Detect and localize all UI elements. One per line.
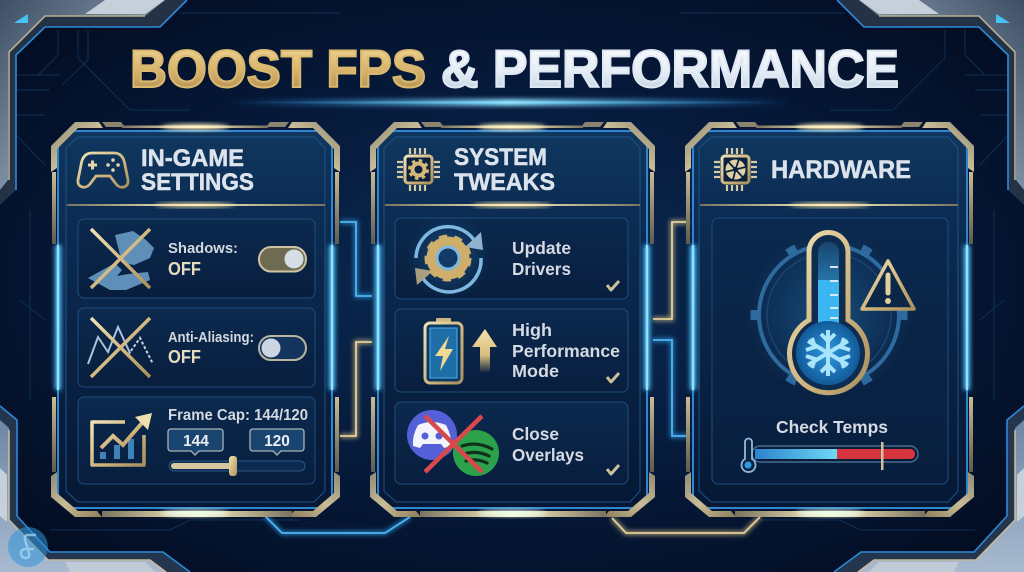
value box: 144 — [168, 429, 223, 455]
row: frame cap — [78, 397, 315, 484]
label: anti-aliasing off: OFF — [168, 347, 201, 367]
title: BOOST FPS — [130, 40, 426, 99]
check mark — [607, 281, 619, 290]
label: close overlays: Close — [512, 424, 559, 444]
label: high performance mode: Mode — [512, 361, 559, 381]
value box: 120 — [250, 429, 304, 455]
heading: in-game settings: SETTINGS — [141, 169, 254, 196]
panel 1 frame — [51, 122, 340, 517]
heading: hardware: HARDWARE — [771, 156, 911, 184]
label: shadows off: Shadows: — [168, 240, 238, 257]
panel 2 frame — [370, 122, 655, 517]
icon: warning triangle — [862, 261, 914, 309]
heading: system tweaks: SYSTEM — [454, 144, 547, 171]
panel: in-game settings — [51, 122, 340, 517]
label: shadows off: OFF — [168, 259, 201, 279]
label: update drivers: Drivers — [512, 259, 571, 279]
row: close overlays — [395, 402, 628, 484]
icon: chip with gear — [397, 148, 440, 191]
row: shadows — [78, 219, 315, 298]
label: anti-aliasing off: Anti-Aliasing: — [168, 329, 254, 346]
label: update drivers: Update — [512, 238, 571, 258]
glows on panel edges — [155, 124, 870, 516]
icon: rising chart — [92, 413, 152, 465]
label: high performance mode: High — [512, 320, 552, 340]
slider — [169, 456, 305, 476]
icon: chip with fan — [714, 148, 757, 191]
toggle: anti-aliasing — [259, 336, 306, 360]
label: frame cap: Frame Cap: 144/120 — [168, 407, 308, 424]
panel: system tweaks — [370, 122, 655, 517]
icon: discord and spotify crossed out — [407, 410, 499, 476]
label: update drivers — [512, 238, 571, 279]
heading: system tweaks — [454, 144, 555, 196]
label: anti-aliasing off — [168, 329, 254, 367]
icon: small thermometer — [742, 439, 756, 472]
label: shadows off — [168, 240, 238, 279]
label: close overlays — [512, 424, 584, 465]
row: high performance mode — [395, 309, 628, 392]
label: high performance mode: Performance — [512, 341, 620, 361]
check mark — [607, 465, 619, 474]
toggle: shadows — [259, 247, 306, 272]
label: close overlays: Overlays — [512, 445, 584, 465]
row: anti-aliasing — [78, 308, 315, 387]
value box: 144: 144 — [183, 433, 209, 450]
heading: system tweaks: TWEAKS — [454, 169, 555, 196]
value box: 120: 120 — [264, 433, 290, 450]
check mark — [607, 373, 619, 382]
icon: thermometer with snowflake — [790, 232, 867, 393]
icon: battery with bolt — [425, 318, 462, 383]
icon: gear ring — [747, 233, 911, 397]
title underline glow — [230, 99, 790, 106]
heading: in-game settings — [141, 145, 254, 196]
label: high performance mode — [512, 320, 620, 381]
connector lines between panels — [265, 222, 760, 533]
icon: gear with refresh arrows — [406, 216, 490, 300]
title — [130, 40, 899, 99]
panel 3 frame — [685, 122, 974, 517]
content box — [712, 218, 948, 484]
icon: gamepad — [78, 153, 128, 187]
title: & PERFORMANCE — [441, 40, 899, 99]
icon: anti-aliasing crossed out — [88, 318, 153, 377]
label: check temps: Check Temps — [776, 417, 888, 437]
logo badge — [8, 527, 48, 567]
row: update drivers — [395, 216, 628, 300]
temperature bar — [752, 442, 918, 470]
heading: in-game settings: IN-GAME — [141, 145, 244, 172]
icon: shadows crossed out — [88, 229, 154, 290]
icon: up arrow — [472, 329, 497, 373]
panel: hardware — [685, 122, 974, 517]
